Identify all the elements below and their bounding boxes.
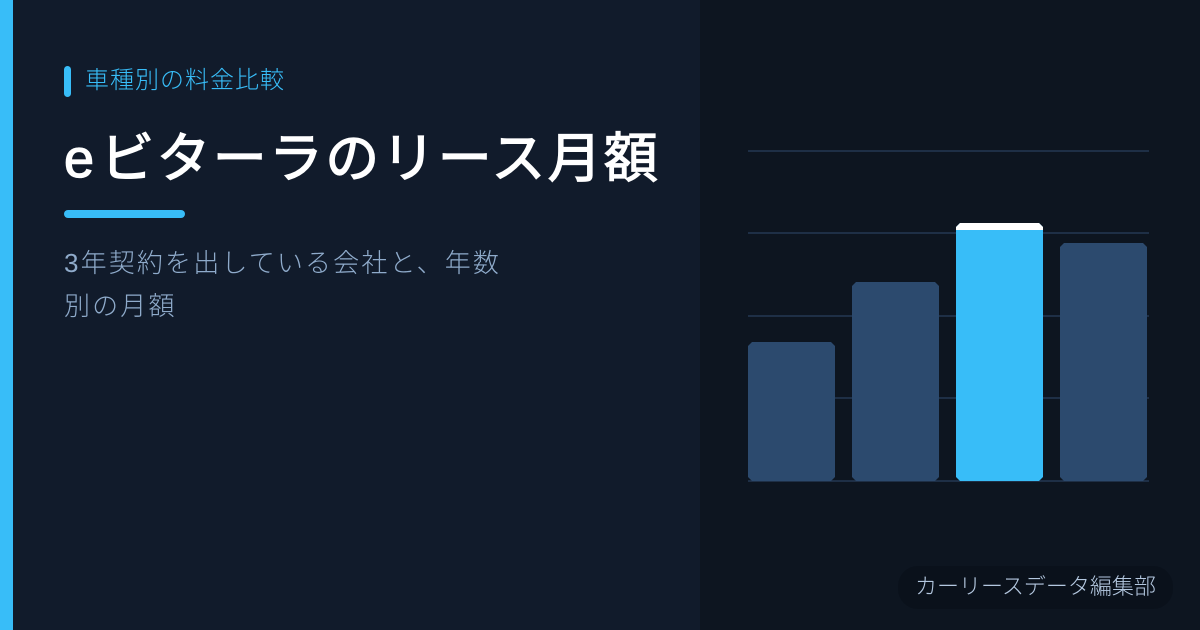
bar 3 white cap [956, 223, 1043, 230]
subtitle: 3年契約を出している会社と、年数 [64, 248, 501, 278]
bar chart [748, 150, 1149, 482]
source badge [898, 566, 1173, 609]
panel: right background [700, 0, 1200, 630]
subtitle: 別の月額 [64, 291, 177, 321]
bar 2 [852, 282, 939, 481]
bar 4 [1060, 243, 1147, 481]
source badge: カーリースデータ編集部 [915, 574, 1156, 599]
eyebrow marker [64, 66, 71, 97]
bar 3 highlighted [956, 223, 1043, 481]
title underline [64, 210, 185, 218]
title: eビターラのリース月額 [64, 129, 660, 189]
eyebrow label: 車種別の料金比較 [85, 67, 285, 94]
subtitle [64, 248, 501, 321]
left accent stripe [0, 0, 13, 630]
bar 1 [748, 342, 835, 481]
